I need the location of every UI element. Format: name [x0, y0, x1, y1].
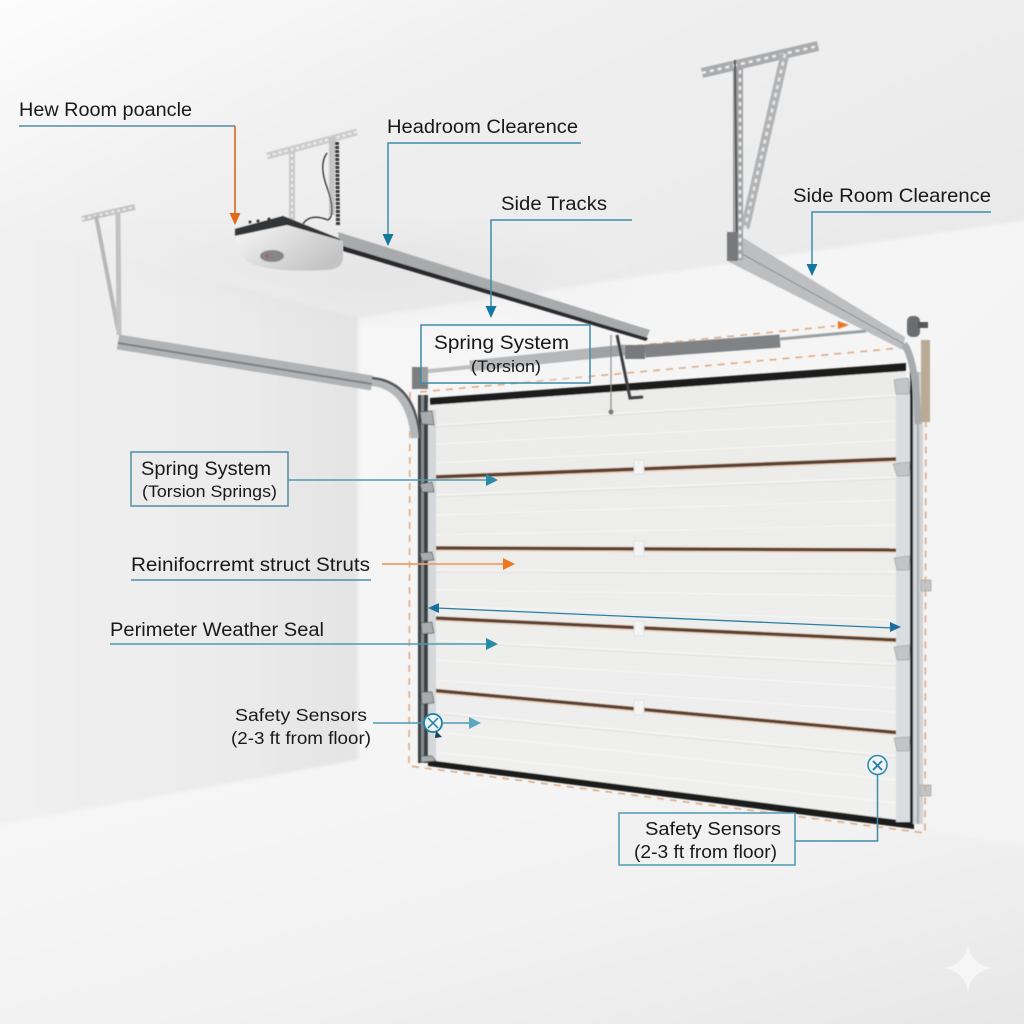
leader: headroom clearence: [382, 117, 581, 246]
callout: spring system torsion springs: [131, 452, 498, 506]
leader: side room clearence: [793, 185, 991, 276]
callout: safety sensors right: (2-3 ft from floor): [634, 842, 777, 862]
callout: safety sensors right: [619, 756, 887, 865]
center rail with bracket: [267, 132, 650, 341]
callout: spring system torsion springs: (Torsion Springs): [142, 482, 277, 501]
sparkle watermark: [944, 944, 992, 992]
leader: side tracks: [486, 194, 632, 318]
bottom door seal: [428, 760, 914, 829]
garage door assembly: [409, 321, 931, 833]
door panel: [428, 369, 914, 828]
orange seal arrowhead: [838, 321, 849, 329]
callout: safety sensors left: (2-3 ft from floor): [231, 728, 371, 748]
left ceiling track with bracket: [82, 207, 420, 438]
strut hinges: [634, 460, 644, 715]
perimeter weather seal dashes: [409, 326, 926, 833]
double arrow: door width: [428, 603, 901, 632]
right ceiling track with bracket: [702, 46, 930, 424]
leader: reinforcement struts: [131, 555, 515, 580]
torsion spring system: [412, 331, 866, 414]
reinforcement struts: [434, 459, 897, 733]
callout: safety sensors right: Safety Sensors: [645, 819, 781, 839]
callout: safety sensors left: Safety Sensors: [235, 705, 367, 725]
right door stile and track: [893, 372, 931, 824]
leader: headroom clearence: Headroom Clearence: [387, 117, 578, 138]
leader: side room clearence: Side Room Clearence: [793, 185, 991, 207]
left door stile and track: [418, 395, 436, 763]
leader: new room pouncle: Hew Room poancle: [19, 100, 192, 121]
top door seal: [430, 363, 906, 405]
leader: perimeter weather seal: Perimeter Weather Seal: [110, 620, 324, 641]
opener motor unit: [235, 216, 343, 271]
callout: spring system torsion: [421, 325, 590, 383]
leader: side tracks: Side Tracks: [501, 194, 607, 215]
leader: perimeter weather seal: [110, 620, 498, 650]
callout: safety sensors left: [231, 705, 481, 748]
leader: new room pouncle: [19, 100, 240, 225]
callout: spring system torsion: Spring System: [434, 333, 569, 354]
leader: reinforcement struts: Reinifocrremt struct Struts: [131, 555, 370, 576]
callout: spring system torsion: (Torsion): [471, 357, 541, 376]
callout: spring system torsion springs: Spring System: [141, 459, 271, 480]
